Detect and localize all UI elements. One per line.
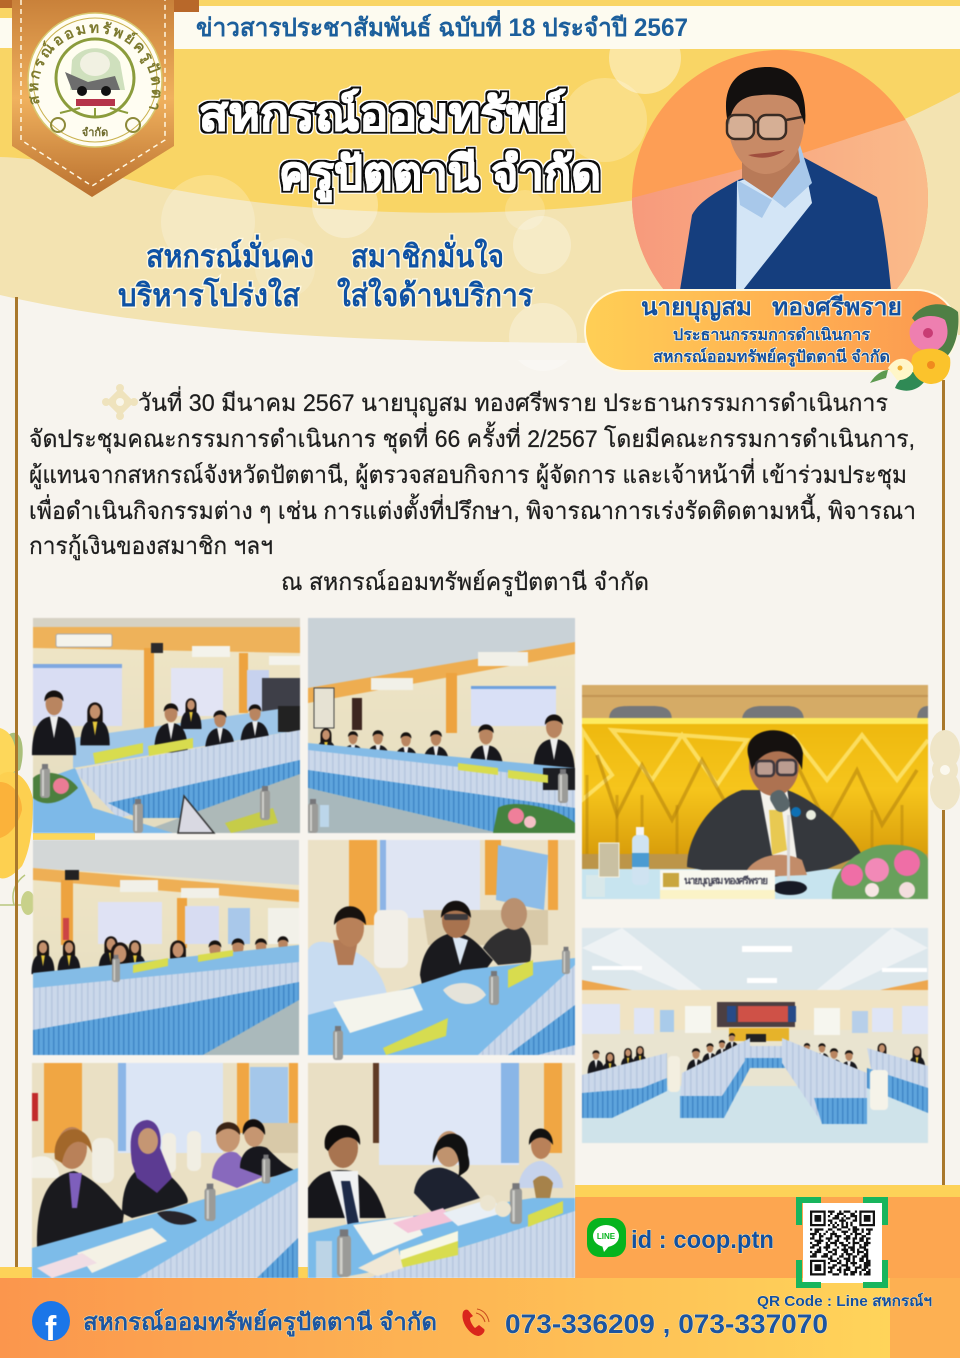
qr corner brackets <box>799 1200 885 1285</box>
photo: women members at table <box>31 1062 299 1278</box>
title: สหกรณ์ออมทรัพย์ <box>199 88 566 140</box>
panel: line contact: id : coop.ptn <box>631 1226 774 1254</box>
panel: body paragraph: วันที่ 30 มีนาคม 2567 นายบุญสม ทองศรีพราย ประธานกรรมการดำเนินการ <box>138 386 888 418</box>
icon: facebook <box>32 1301 70 1348</box>
icon: line <box>587 1218 626 1257</box>
panel: footer band <box>0 1278 960 1358</box>
icon: paragraph ornament <box>102 384 138 420</box>
facebook label: สหกรณ์ออมทรัพย์ครูปัตตานี จำกัด <box>83 1308 437 1337</box>
icon: facebook: f <box>45 1310 57 1348</box>
icon: line: LINE <box>597 1232 616 1241</box>
photo: meeting room wide left view <box>31 618 301 835</box>
panel: chairman name pill: สหกรณ์ออมทรัพย์ครูปัตตานี จำกัด <box>653 347 890 368</box>
shirt <box>736 157 812 290</box>
title <box>199 88 601 202</box>
photo: full meeting hall <box>581 928 929 1144</box>
newsletter issue heading: ข่าวสารประชาสัมพันธ์ ฉบับที่ 18 ประจำปี 2567 <box>196 10 688 42</box>
motto text block: สหกรณ์มั่นคง <box>146 234 314 274</box>
panel: header background waves <box>0 0 960 371</box>
panel: qr code <box>757 1200 932 1310</box>
panel: body paragraph: จัดประชุมคณะกรรมการดำเนินการ ชุดที่ 66 ครั้งที่ 2/2567 โดยมีคณะกรรมการดำเนินการ, <box>29 421 915 454</box>
qr caption: QR Code : Line สหกรณ์ฯ <box>757 1292 932 1310</box>
panel: body paragraph: ณ สหกรณ์ออมทรัพย์ครูปัตตานี จำกัด <box>281 568 649 597</box>
motto text block: บริหารโปร่งใส <box>118 277 300 313</box>
panel: chairman portrait <box>632 50 928 289</box>
photo: chairman speaking at microphone <box>581 684 929 900</box>
icon: left yellow flower decoration <box>0 728 95 915</box>
neck and head <box>742 148 800 198</box>
panel: chairman name pill: ทองศรีพราย <box>772 294 902 321</box>
glasses <box>727 115 802 139</box>
motto text block: สมาชิกมั่นใจ <box>351 234 504 274</box>
qr pattern <box>810 1210 875 1276</box>
icon: tropical flowers <box>870 304 958 391</box>
icon: cooperative logo seal: จำกัด <box>82 126 108 139</box>
icon: right thai ornament <box>930 730 960 810</box>
photo: three seated members <box>307 839 576 1060</box>
icon: cooperative logo seal <box>27 12 163 148</box>
panel: ribbon with logo <box>0 0 199 197</box>
panel: left and right gold border lines <box>15 297 945 1267</box>
photo: staff members with name plates <box>307 1062 576 1278</box>
title: ครูปัตตานี จำกัด <box>279 147 601 202</box>
photo: chairman speaking at microphone: นายบุญสม ทองศรีพราย <box>684 875 768 887</box>
phone numbers: 073-336209 , 073-337070 <box>505 1309 828 1339</box>
panel: body paragraph: เพื่อดำเนินกิจกรรมต่าง ๆ เช่น การแต่งตั้งที่ปรึกษา, พิจารณาการเร่งรัดติดตามหนี้, พิจารณา <box>29 493 916 525</box>
panel: body paragraph <box>29 384 916 597</box>
panel: bottom right orange contact block <box>0 1185 960 1287</box>
photo: participants along table <box>30 839 300 1056</box>
panel: chairman name pill: นายบุญสม <box>641 294 752 323</box>
jacket <box>680 157 891 290</box>
panel: body paragraph: ผู้แทนจากสหกรณ์จังหวัดปัตตานี, ผู้ตรวจสอบกิจการ ผู้จัดการ และเจ้าหน้าที่ เข้าร่วมประชุม <box>29 458 907 490</box>
icon: phone <box>462 1309 489 1336</box>
panel: chairman name pill: ประธานกรรมการดำเนินการ <box>673 326 870 344</box>
panel: line contact <box>587 1218 774 1257</box>
motto text block <box>118 234 533 313</box>
panel: chairman name pill <box>585 290 957 371</box>
panel: body paragraph: การกู้เงินของสมาชิก ฯลฯ <box>29 533 273 561</box>
photo: meeting room long table <box>307 618 576 834</box>
motto text block: ใส่ใจด้านบริการ <box>337 277 533 313</box>
facebook label <box>32 1301 437 1348</box>
panel: top banner strip <box>0 0 960 49</box>
